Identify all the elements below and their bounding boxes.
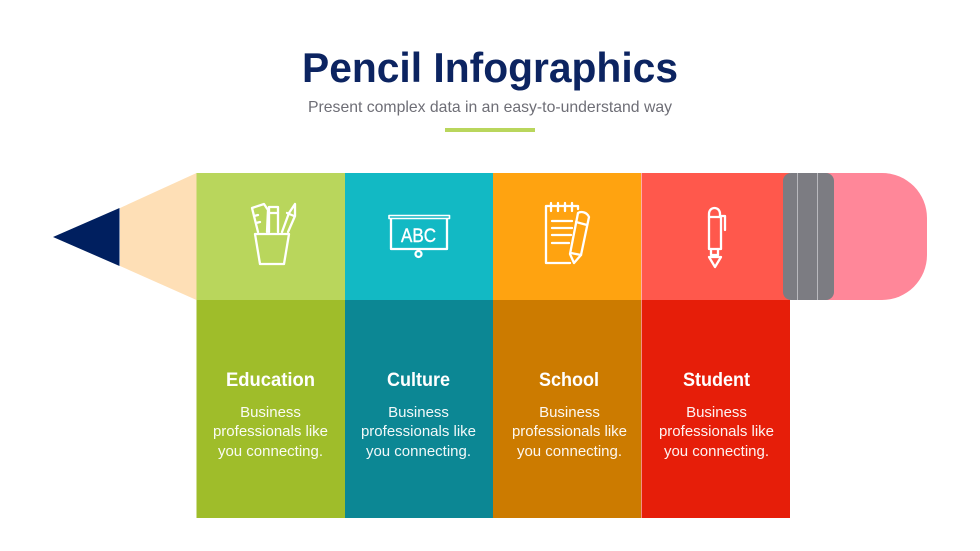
panel: culture [345,173,493,518]
panel: education [196,173,345,518]
label: education: Education [226,370,315,391]
icon: presentation board [389,216,450,257]
label: culture: Culture [387,370,450,391]
panel: school [493,173,641,518]
pencil wood tip [120,173,196,300]
description: school [512,404,627,460]
description: student: you connecting. [664,443,769,460]
description: education [213,404,328,460]
description: student: Business [686,404,747,421]
eraser [825,173,927,300]
icon: pencil cup [252,204,295,264]
description: culture [361,404,476,460]
description: student: professionals like [659,423,774,440]
pencil ferrule [783,173,834,300]
description: education: Business [240,404,301,421]
panel: student [642,173,790,518]
icon: notepad and pencil [546,203,589,263]
description: student [659,404,774,460]
description: education: professionals like [213,423,328,440]
description: culture: Business [388,404,449,421]
description: school: you connecting. [517,443,622,460]
description: culture: professionals like [361,423,476,440]
description: education: you connecting. [218,443,323,460]
label: school: School [539,370,599,391]
icon: pen [709,208,725,267]
subtitle: Present complex data in an easy-to-understand way [308,99,672,116]
icon: presentation board: ABC [401,226,436,247]
title: Pencil Infographics [302,44,678,91]
label: student: Student [683,370,751,391]
description: school: Business [539,404,600,421]
pencil lead tip [53,208,120,266]
accent underline [445,128,535,132]
description: school: professionals like [512,423,627,440]
description: culture: you connecting. [366,443,471,460]
